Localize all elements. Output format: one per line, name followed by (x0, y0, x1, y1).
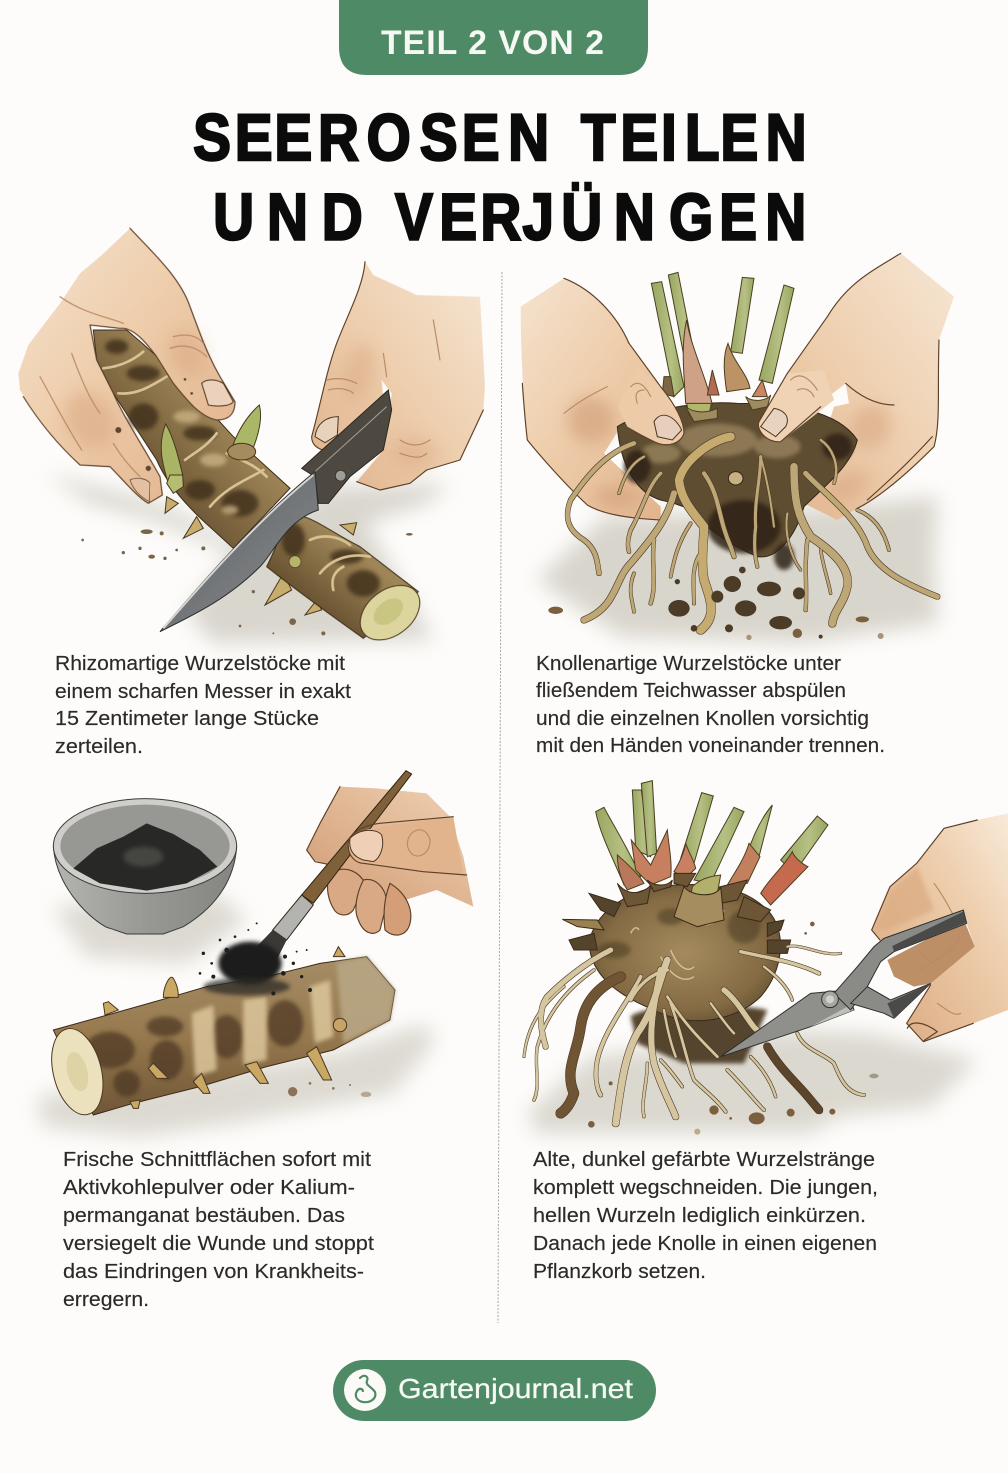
panel: step 2 separating tubers (521, 253, 954, 757)
caption: step 4: Danach jede Knolle in einen eigenen (533, 1232, 877, 1255)
caption: step 2: und die einzelnen Knollen vorsichtig (536, 707, 869, 730)
crown nubs (562, 873, 791, 953)
reddish growth buds (617, 830, 808, 905)
rhizome left section (93, 330, 290, 548)
soil crumbs (81, 529, 413, 635)
rhizome spikes (103, 947, 345, 1108)
caption: step 4: komplett wegschneiden. Die jungen, (533, 1176, 878, 1199)
caption: step 2: mit den Händen voneinander trennen. (536, 734, 885, 757)
panel: step 4 trimming roots (524, 781, 1008, 1283)
right hand holding knife (312, 262, 485, 490)
caption: step 3: Frische Schnittflächen sofort mit (63, 1148, 371, 1171)
roots (524, 946, 864, 1123)
icon: brand logo (344, 1369, 386, 1411)
paint brush (250, 771, 412, 967)
footer badge: brand: Gartenjournal.net (398, 1373, 633, 1404)
thumb over brush (348, 817, 467, 875)
caption: step 4: hellen Wurzeln lediglich einkürzen. (533, 1204, 866, 1227)
right hand (758, 253, 954, 520)
caption: step 4: Alte, dunkel gefärbte Wurzelstränge (533, 1148, 875, 1171)
knife (160, 390, 392, 632)
left hand (521, 278, 684, 520)
bowl of charcoal powder (53, 799, 237, 934)
header tab: part label (339, 0, 648, 75)
caption: step 3: erregern. (63, 1288, 149, 1311)
ground wash (527, 1030, 977, 1133)
spike nubs (165, 497, 357, 615)
footer badge: brand (333, 1360, 656, 1421)
caption: step 3: permanganat bestäuben. Das (63, 1204, 345, 1227)
green shoot buds (161, 405, 261, 493)
caption: step 3: versiegelt die Wunde und stoppt (63, 1232, 374, 1255)
green stems (596, 781, 828, 885)
caption: step 4 (533, 1148, 878, 1283)
caption: step 2: Knollenartige Wurzelstöcke unter (536, 652, 841, 675)
panel: step 3 dusting with charcoal (37, 771, 473, 1311)
rhizome log with cut end (43, 957, 395, 1120)
pink growth buds (662, 320, 771, 422)
caption: step 2: fließendem Teichwasser abspülen (536, 679, 846, 702)
illustration: tuber and scissors (524, 781, 1008, 1135)
hand holding scissors (872, 813, 1008, 1042)
tuber body (617, 403, 857, 570)
caption: step 1 (55, 652, 351, 758)
ground soil wash (537, 497, 937, 643)
title (193, 101, 807, 255)
ground wash (37, 893, 433, 1137)
caption: step 3 (63, 1148, 374, 1311)
illustration: hands pulling tuber apart (521, 253, 954, 643)
illustration: bowl, brush and rhizome (37, 771, 473, 1137)
title: SEEROSEN TEILEN (193, 101, 807, 175)
soil specks (288, 1082, 371, 1097)
rhizome right section with cut end (267, 515, 430, 651)
tuber body (589, 885, 780, 1063)
header tab: part label: TEIL 2 VON 2 (381, 24, 605, 62)
panel: step 1 rhizome cutting (18, 228, 485, 758)
right hand with curled fingers (307, 787, 473, 935)
thumbs over tuber (564, 343, 834, 445)
title: UND VERJÜNGEN (213, 181, 806, 255)
caption: step 1: Rhizomartige Wurzelstöcke mit (55, 652, 345, 675)
caption: step 1: 15 Zentimeter lange Stücke (55, 707, 319, 730)
ground shadow (47, 473, 450, 643)
scissors (721, 910, 967, 1057)
caption: step 3: das Eindringen von Krankheits- (63, 1260, 364, 1283)
charcoal powder cloud (199, 922, 312, 995)
caption: step 3: Aktivkohlepulver oder Kalium- (63, 1176, 355, 1199)
caption: step 1: einem scharfen Messer in exakt (55, 680, 351, 703)
caption: step 1: zerteilen. (55, 735, 143, 758)
green cut stems (651, 272, 794, 397)
illustration: hands cutting rhizome with knife (18, 228, 485, 651)
roots (567, 437, 937, 630)
caption: step 2 (536, 652, 885, 757)
soil clumps (548, 567, 884, 640)
soil crumbs (588, 922, 879, 1135)
caption: step 4: Pflanzkorb setzen. (533, 1260, 706, 1283)
left hand gripping rhizome (18, 228, 235, 503)
